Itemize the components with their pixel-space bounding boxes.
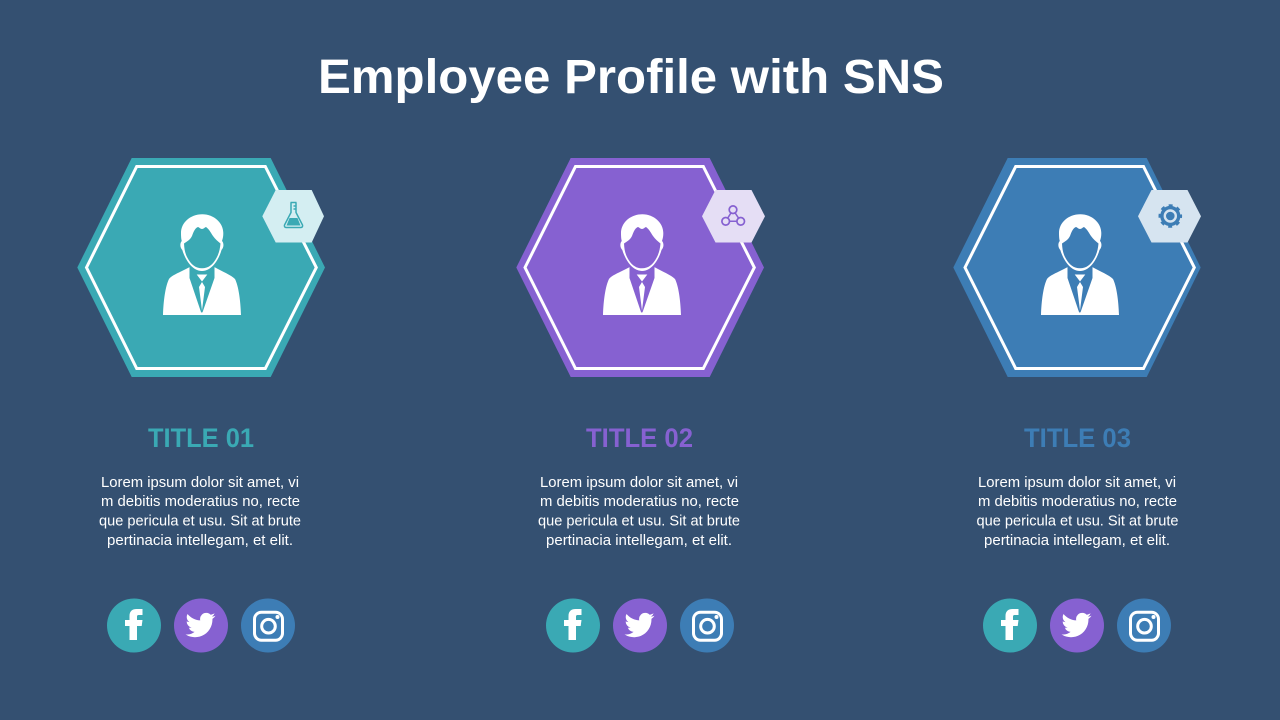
text block: description 03: Lorem ipsum dolor sit amet, vi <box>978 475 1176 491</box>
icon: person in suit <box>1041 214 1119 315</box>
icon: instagram <box>1117 598 1171 652</box>
icon: facebook <box>983 598 1037 652</box>
text block: description 03 <box>976 475 1178 549</box>
icon: facebook <box>107 598 161 652</box>
panel: profile 02 <box>516 158 765 652</box>
heading: title 02: TITLE 02 <box>586 423 693 453</box>
text block: description 02: que pericula et usu. Sit at brute <box>538 514 740 530</box>
text block: description 01: m debitis moderatius no, recte <box>101 494 300 510</box>
text block: description 03: m debitis moderatius no, recte <box>978 494 1177 510</box>
text block: description 02: Lorem ipsum dolor sit amet, vi <box>540 475 738 491</box>
text block: description 02 <box>538 475 740 549</box>
icon: blue hexagon with white outline <box>953 158 1201 377</box>
heading: title 01: TITLE 01 <box>148 423 254 453</box>
icon: small hexagon with molecule <box>702 190 765 242</box>
icon: purple hexagon with white outline <box>516 158 764 377</box>
title: Employee Profile with SNS <box>318 51 944 104</box>
text block: description 03: pertinacia intellegam, et elit. <box>984 533 1170 549</box>
icon: twitter <box>1050 598 1104 652</box>
icon: twitter <box>174 598 228 652</box>
icon: facebook <box>546 598 600 652</box>
text block: description 02: pertinacia intellegam, et elit. <box>546 533 732 549</box>
panel: profile 01 <box>77 158 325 652</box>
text block: description 01: que pericula et usu. Sit at brute <box>99 514 301 530</box>
icon: small hexagon with flask <box>262 190 324 242</box>
text block: description 01: pertinacia intellegam, et elit. <box>107 533 293 549</box>
text block: description 02: m debitis moderatius no, recte <box>540 494 739 510</box>
icon: small hexagon with gear <box>1138 190 1201 242</box>
icon: person in suit <box>163 214 241 315</box>
icon: teal hexagon with white outline <box>77 158 325 377</box>
icon: person in suit <box>603 214 681 315</box>
text block: description 03: que pericula et usu. Sit at brute <box>976 514 1178 530</box>
icon: instagram <box>241 598 295 652</box>
panel: profile 03 <box>953 158 1201 652</box>
heading: title 03: TITLE 03 <box>1024 423 1131 453</box>
text block: description 01 <box>99 475 301 549</box>
icon: instagram <box>680 598 734 652</box>
icon: twitter <box>613 598 667 652</box>
text block: description 01: Lorem ipsum dolor sit amet, vi <box>101 475 299 491</box>
